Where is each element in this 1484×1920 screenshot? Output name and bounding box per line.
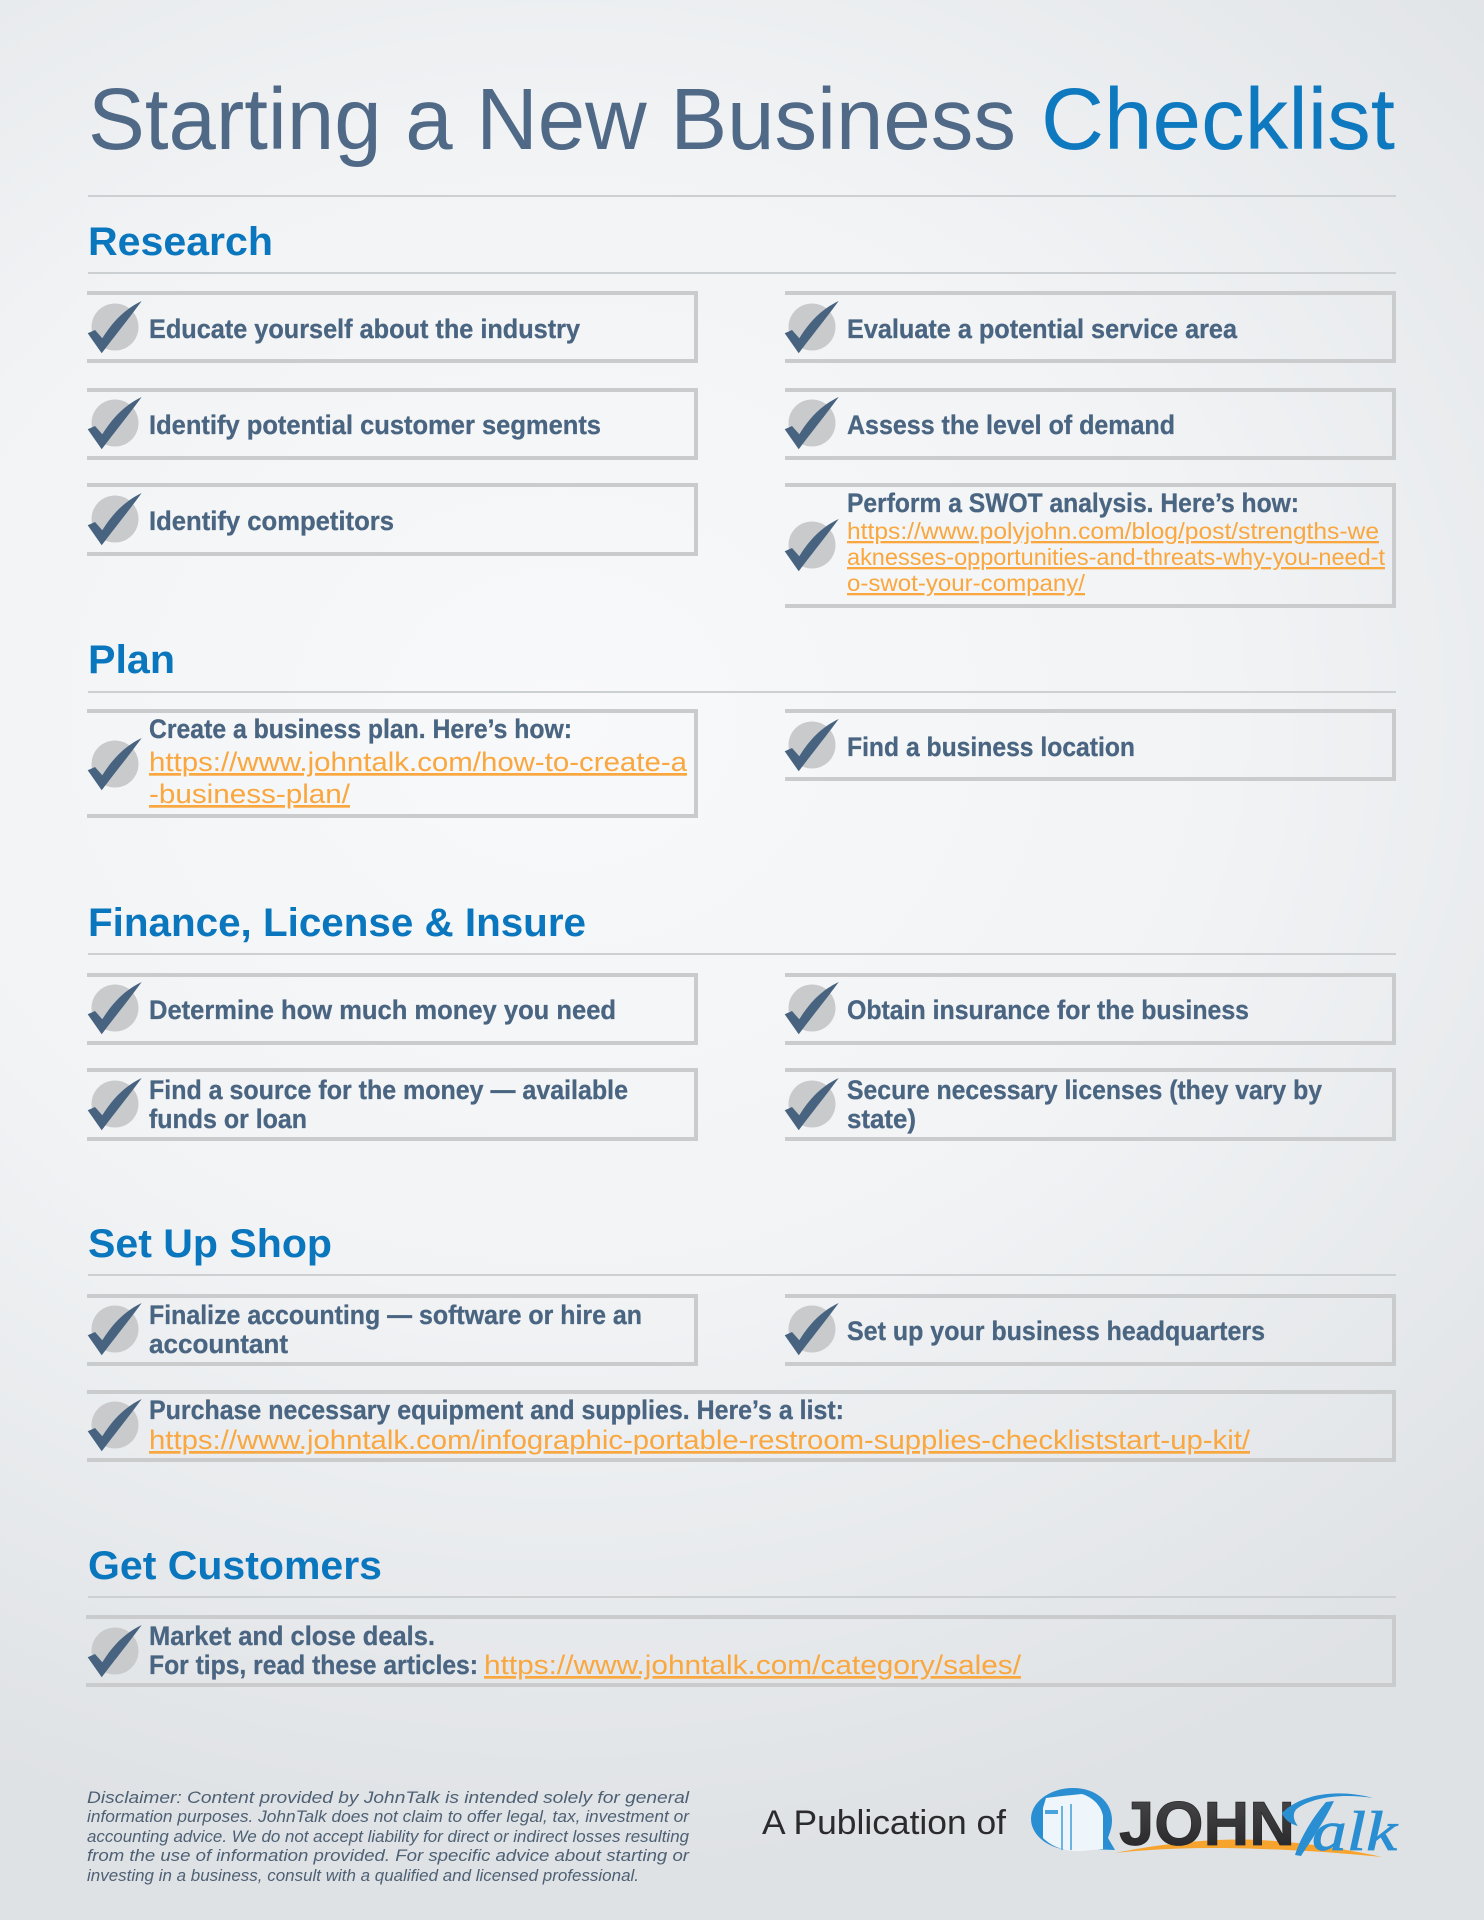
item: Market and close deals: Market and close deals. (149, 1621, 435, 1651)
item: Finalize accounting: accountant (149, 1329, 288, 1359)
item: Determine how much money you need (87, 975, 696, 1043)
item: Purchase necessary equipment and supplies: Purchase necessary equipment and supplies. Here’s a list: (149, 1395, 844, 1425)
disclaimer (87, 1789, 691, 1885)
item: Market and close deals: https://www.johntalk.com/category/sales/ (484, 1650, 1022, 1680)
item: Assess the level of demand (785, 390, 1394, 458)
item: Evaluate a potential service area: Evaluate a potential service area (847, 314, 1237, 344)
item: Educate yourself about the industry: Educate yourself about the industry (149, 314, 580, 344)
title: Starting a New Business (88, 71, 1016, 168)
item: Find a source for the money: Find a source for the money — available (149, 1075, 628, 1105)
item: Secure necessary licenses: state) (847, 1104, 916, 1134)
disclaimer: from the use of information provided. For specific advice about starting or (87, 1847, 691, 1865)
item: Identify competitors: Identify competitors (149, 506, 394, 536)
item: Evaluate a potential service area (785, 293, 1394, 361)
title: Checklist (1041, 71, 1395, 168)
heading: Finance, License & Insure: Finance, License & Insure (88, 901, 586, 945)
item: Find a business location (785, 711, 1394, 779)
item: Create a business plan (87, 711, 696, 816)
item: Purchase necessary equipment and supplies: https://www.johntalk.com/infographic-portable-restroom-supplies-checkliststart-up-kit/ (149, 1425, 1251, 1455)
heading: Set Up Shop: Set Up Shop (88, 1222, 332, 1266)
item: Perform a SWOT analysis: aknesses-opportunities-and-threats-why-you-need-t (847, 544, 1386, 570)
item: Obtain insurance for the business (785, 975, 1394, 1043)
item: Assess the level of demand: Assess the level of demand (847, 410, 1175, 440)
disclaimer: accounting advice. We do not accept liability for direct or indirect losses resulting (87, 1828, 690, 1846)
logo wordmark Talk: alk (1312, 1801, 1398, 1863)
item: Purchase necessary equipment and supplies (87, 1392, 1394, 1460)
heading: Research: Research (88, 220, 273, 264)
item: Set up your business headquarters (785, 1296, 1394, 1364)
item: Perform a SWOT analysis: o-swot-your-company/ (847, 570, 1086, 596)
section: Finance, License & Insure (87, 901, 1396, 1139)
heading: Plan: Plan (88, 638, 175, 682)
item: Create a business plan: https://www.johntalk.com/how-to-create-a (149, 747, 688, 777)
logo: JohnTalk (1031, 1788, 1398, 1863)
item: Create a business plan: Create a business plan. Here’s how: (149, 714, 572, 744)
item: Determine how much money you need: Determine how much money you need (149, 995, 616, 1025)
item: Create a business plan: -business-plan/ (149, 779, 351, 809)
item: Market and close deals (86, 1617, 1394, 1685)
item: Market and close deals: For tips, read these articles: (149, 1650, 478, 1680)
item: Educate yourself about the industry (87, 293, 696, 361)
item: Identify potential customer segments: Identify potential customer segments (149, 410, 601, 440)
section: Set Up Shop (87, 1222, 1396, 1460)
item: Find a business location: Find a business location (847, 732, 1135, 762)
disclaimer: Disclaimer: Content provided by JohnTalk is intended solely for general (87, 1789, 691, 1807)
heading: Get Customers: Get Customers (88, 1544, 382, 1588)
item: Find a source for the money (87, 1070, 696, 1139)
logo wordmark Talk (1282, 1793, 1398, 1863)
section: Plan (87, 638, 1396, 816)
item: Secure necessary licenses: Secure necessary licenses (they vary by (847, 1075, 1322, 1105)
logo wordmark JOHN: JOHN (1119, 1790, 1295, 1859)
publication label: A Publication of (762, 1804, 1007, 1842)
logo swoosh (1115, 1840, 1382, 1857)
disclaimer: information purposes. JohnTalk does not claim to offer legal, tax, investment or (87, 1808, 691, 1826)
item: Identify competitors (87, 485, 696, 554)
logo icon: speech bubble with portable restroom (1031, 1788, 1115, 1851)
item: Set up your business headquarters: Set up your business headquarters (847, 1316, 1265, 1346)
item: Identify potential customer segments (87, 390, 696, 458)
item: Finalize accounting: Finalize accounting — software or hire an (149, 1300, 642, 1330)
section: Get Customers (86, 1544, 1396, 1685)
item: Secure necessary licenses (785, 1070, 1394, 1139)
section: Research (87, 220, 1396, 606)
item: Perform a SWOT analysis (785, 485, 1394, 606)
item: Perform a SWOT analysis: https://www.polyjohn.com/blog/post/strengths-we (847, 518, 1379, 544)
item: Find a source for the money: funds or loan (149, 1104, 307, 1134)
item: Obtain insurance for the business: Obtain insurance for the business (847, 995, 1249, 1025)
disclaimer: investing in a business, consult with a qualified and licensed professional. (87, 1867, 639, 1885)
item: Perform a SWOT analysis: Perform a SWOT analysis. Here’s how: (847, 488, 1299, 518)
item: Finalize accounting (87, 1296, 696, 1364)
